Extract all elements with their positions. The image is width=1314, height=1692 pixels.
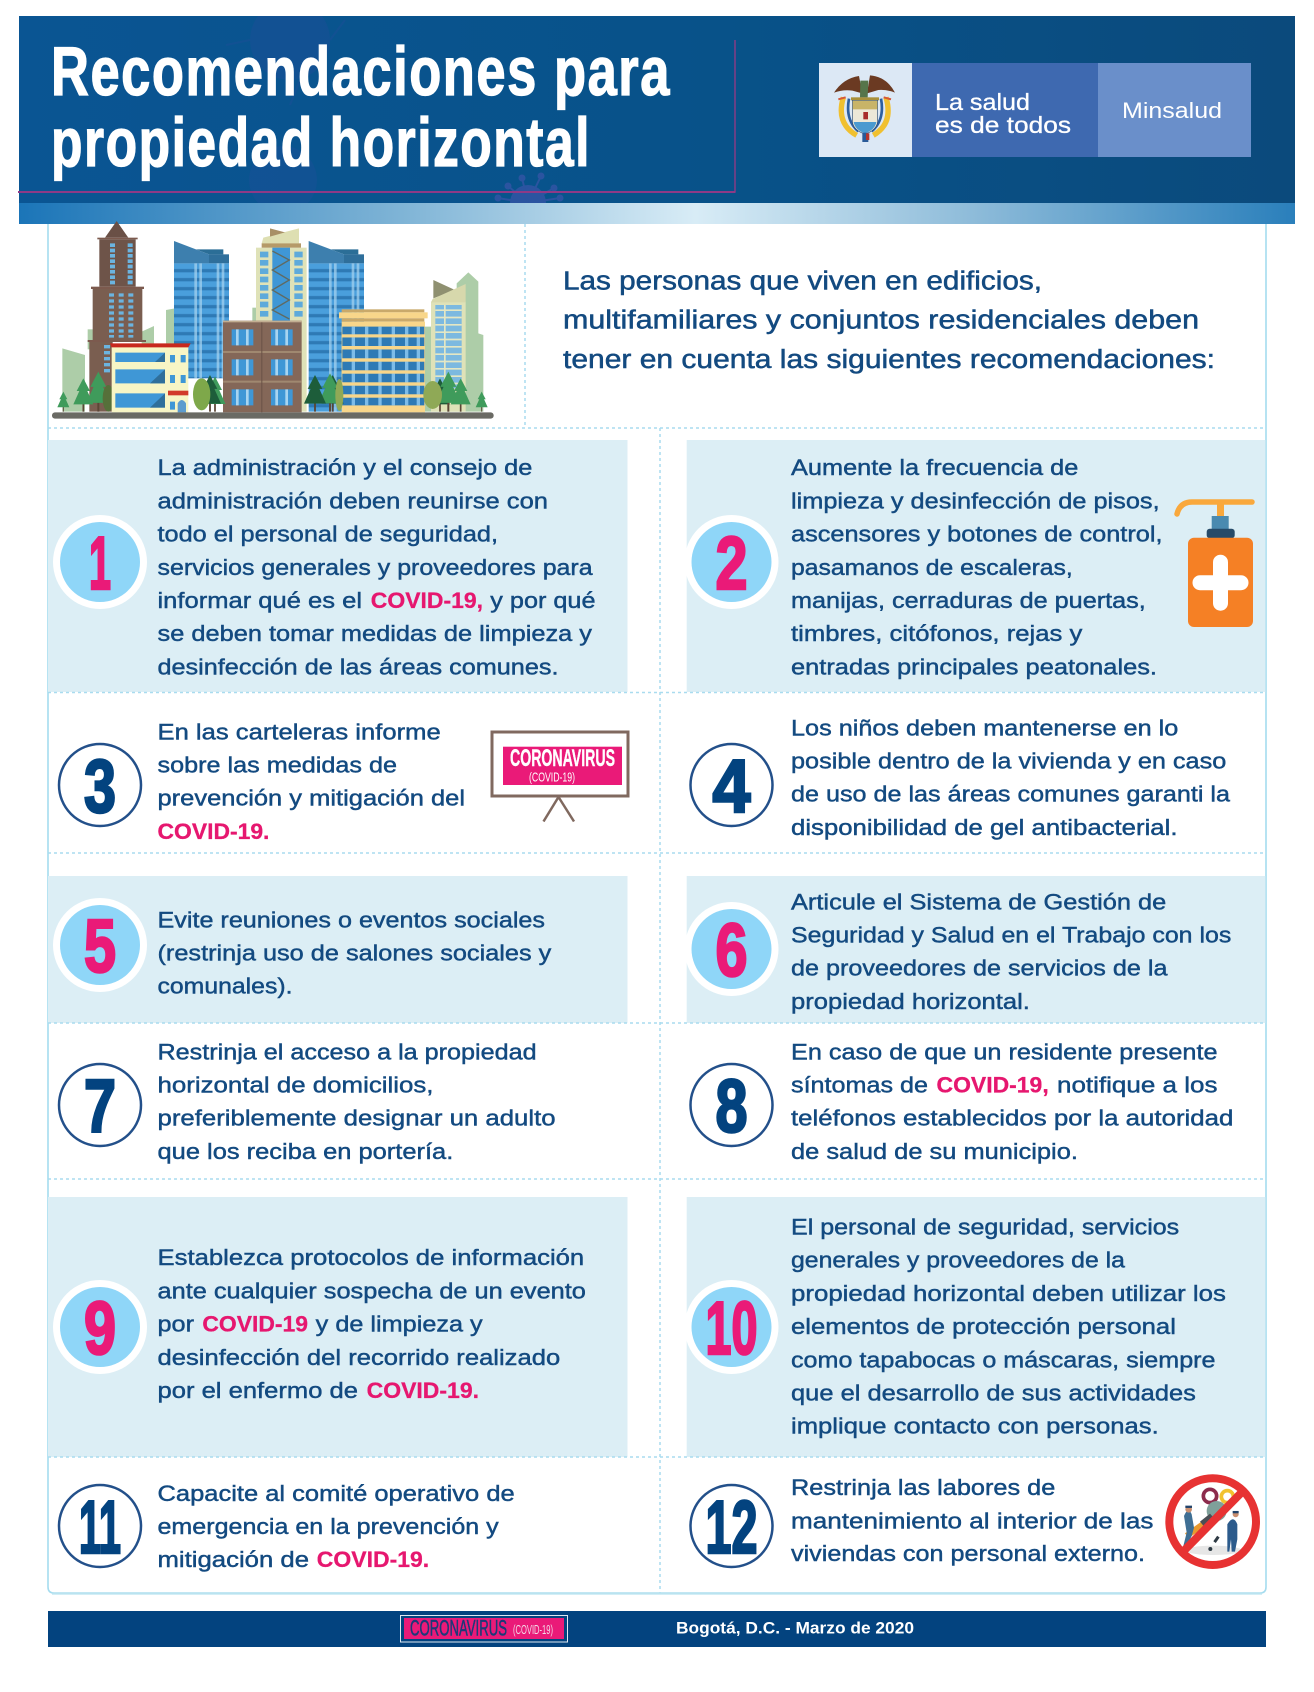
- text block 11: Capacite al comité operativo de: [158, 1481, 515, 1506]
- ministry name: Minsalud: [1122, 98, 1222, 123]
- icon: coat of arms: [834, 75, 895, 142]
- intro text: [563, 268, 1215, 374]
- number badge 3: [59, 744, 141, 828]
- text block 2: ascensores y botones de control,: [791, 522, 1162, 547]
- slogan: es de todos: [935, 112, 1071, 138]
- text block 12: Restrinja las labores de: [791, 1475, 1055, 1500]
- text block 1: se deben tomar medidas de limpieza y: [158, 621, 593, 646]
- gradient strip: [19, 203, 1295, 224]
- number badge 1: 1: [89, 521, 111, 605]
- text block 4: Los niños deben mantenerse en lo: [791, 715, 1178, 740]
- text block 1: administración deben reunirse con: [158, 488, 548, 514]
- panel frame: [48, 224, 1266, 1593]
- text block 5: [158, 907, 552, 998]
- number badge 3: 3: [84, 744, 116, 828]
- number badge 7: [59, 1064, 141, 1148]
- brown tower: [88, 221, 146, 412]
- number badge 8: 8: [716, 1064, 748, 1148]
- text block 10: generales y proveedores de la: [791, 1248, 1126, 1273]
- text block 8: de salud de su municipio.: [791, 1139, 1078, 1164]
- number badge 10: [684, 1280, 778, 1374]
- text block 11: mitigación de: [158, 1547, 309, 1572]
- text block 1: servicios generales y proveedores para: [158, 555, 593, 580]
- panel: recommendation 3: [59, 719, 628, 844]
- text block 12: viviendas con personal externo.: [791, 1541, 1145, 1566]
- number badge 9: 9: [84, 1286, 116, 1370]
- text block 1: [158, 455, 596, 679]
- number badge 11: 11: [79, 1485, 121, 1569]
- coronavirus badge: CORONAVIRUS: [410, 1616, 507, 1640]
- panel: recommendation 1: [53, 455, 596, 679]
- text block 9: COVID-19: [202, 1312, 308, 1337]
- right pale tower: [431, 280, 466, 412]
- blue towers: [174, 241, 364, 412]
- trees: [57, 372, 488, 412]
- central cream tower: [256, 228, 307, 412]
- text block 4: posible dentro de la vivienda y en caso: [791, 748, 1226, 774]
- intro text: multifamiliares y conjuntos residenciales deben: [563, 306, 1199, 334]
- text block 9: COVID-19.: [367, 1378, 479, 1403]
- number badge 4: 4: [712, 744, 751, 828]
- text block 7: preferiblemente designar un adulto: [158, 1106, 556, 1131]
- text block 1: todo el personal de seguridad,: [158, 522, 498, 547]
- number badge 5: [53, 898, 147, 992]
- slogan: [935, 89, 1071, 138]
- text block 5: comunales).: [158, 974, 292, 998]
- text block 9: Establezca protocolos de información: [158, 1245, 584, 1270]
- number badge 12: 12: [706, 1485, 758, 1569]
- text block 7: [158, 1039, 556, 1164]
- text block 2: limpieza y desinfección de pisos,: [791, 488, 1160, 514]
- text block 5: (restrinja uso de salones sociales y: [158, 940, 552, 966]
- text block 9: desinfección del recorrido realizado: [158, 1345, 560, 1370]
- text block 3: COVID-19.: [158, 819, 269, 844]
- text block 11: [158, 1481, 515, 1572]
- text block 2: manijas, cerraduras de puertas,: [791, 588, 1146, 613]
- panel: recommendation 9: [53, 1245, 586, 1403]
- ground: [52, 412, 494, 419]
- coronavirus badge: (COVID-19): [513, 1623, 553, 1637]
- number badge 6: 6: [716, 908, 748, 992]
- text block 10: [791, 1214, 1226, 1439]
- intro text: Las personas que viven en edificios,: [563, 268, 1042, 296]
- text block 7: horizontal de domicilios,: [158, 1072, 434, 1098]
- text block 6: [791, 889, 1231, 1014]
- text block 2: Aumente la frecuencia de: [791, 455, 1078, 480]
- text block 8: En caso de que un residente presente: [791, 1039, 1218, 1064]
- icon: coronavirus board: CORONAVIRUS: [510, 745, 615, 772]
- icon: coronavirus board: (COVID-19): [529, 770, 575, 784]
- title: Recomendaciones para: [51, 33, 671, 110]
- text block 7: Restrinja el acceso a la propiedad: [158, 1039, 537, 1064]
- text block 10: implique contacto con personas.: [791, 1414, 1159, 1439]
- text block 9: [158, 1245, 586, 1403]
- text block 8: notifique a los: [1057, 1072, 1218, 1098]
- number badge 10: 10: [706, 1286, 758, 1370]
- panel: recommendation 2: [684, 455, 1253, 679]
- number badge 8: [690, 1064, 772, 1148]
- text block 12: mantenimiento al interior de las: [791, 1508, 1153, 1533]
- number badge 2: 2: [716, 521, 748, 605]
- text block 4: de uso de las áreas comunes garanti la: [791, 782, 1231, 807]
- text block 9: por el enfermo de: [158, 1378, 358, 1403]
- panel: recommendation 8: [690, 1039, 1233, 1164]
- text block 9: ante cualquier sospecha de un evento: [158, 1278, 586, 1303]
- text block 3: sobre las medidas de: [158, 752, 397, 778]
- panel: recommendation 4: [690, 715, 1231, 840]
- illustration: city buildings: [52, 221, 494, 419]
- text block 3: [158, 719, 465, 844]
- number badge 11: [59, 1485, 141, 1569]
- title: propiedad horizontal: [51, 104, 591, 181]
- panel: recommendation 12: [690, 1475, 1256, 1569]
- slogan: La salud: [935, 89, 1030, 115]
- text block 7: que los reciba en portería.: [158, 1139, 453, 1164]
- panel: recommendation 11: [59, 1481, 515, 1572]
- panel: recommendation 10: [684, 1214, 1226, 1439]
- panel: recommendation 5: [53, 898, 552, 998]
- number badge 9: [53, 1280, 147, 1374]
- text block 12: [791, 1475, 1153, 1566]
- text block 6: Articule el Sistema de Gestión de: [791, 889, 1166, 914]
- text block 9: y de limpieza y: [316, 1312, 484, 1337]
- text block 9: por: [158, 1312, 195, 1337]
- text block 3: prevención y mitigación del: [158, 786, 465, 811]
- text block 3: En las carteleras informe: [158, 719, 441, 744]
- text block 8: [791, 1039, 1233, 1164]
- text block 8: teléfonos establecidos por la autoridad: [791, 1106, 1233, 1131]
- number badge 6: [684, 902, 778, 996]
- text block 5: Evite reuniones o eventos sociales: [158, 907, 545, 932]
- accent line frame: [18, 40, 735, 192]
- text block 11: COVID-19.: [317, 1547, 429, 1572]
- intro text: tener en cuenta las siguientes recomendaciones:: [563, 346, 1215, 374]
- icon: no maintenance sign: [1169, 1478, 1256, 1565]
- icon: sanitizer bottle: [1177, 502, 1253, 627]
- title: [51, 33, 671, 181]
- text block 1: La administración y el consejo de: [158, 455, 532, 480]
- shaded row backgrounds: [48, 440, 1266, 1457]
- icon: small virus: [494, 172, 564, 203]
- footer date: Bogotá, D.C. - Marzo de 2020: [676, 1618, 914, 1638]
- text block 6: propiedad horizontal.: [791, 989, 1030, 1014]
- yellow banded building: [339, 309, 428, 412]
- text block 2: pasamanos de escaleras,: [791, 555, 1073, 580]
- logo block: [819, 63, 1251, 157]
- yellow low building: [110, 343, 191, 412]
- panel: recommendation 6: [684, 889, 1231, 1014]
- header banner: [18, 16, 1295, 203]
- text block 1: desinfección de las áreas comunes.: [158, 654, 558, 679]
- footer bar: [48, 1611, 1266, 1647]
- text block 8: síntomas de: [791, 1072, 928, 1098]
- text block 4: disponibilidad de gel antibacterial.: [791, 815, 1178, 840]
- number badge 7: 7: [84, 1064, 116, 1148]
- background pale buildings: [62, 272, 483, 412]
- number badge 1: [53, 515, 147, 609]
- text block 10: propiedad horizontal deben utilizar los: [791, 1281, 1226, 1306]
- brown building: [223, 321, 302, 412]
- text block 6: Seguridad y Salud en el Trabajo con los: [791, 922, 1231, 948]
- panel: recommendation 7: [59, 1039, 556, 1164]
- text block 2: timbres, citófonos, rejas y: [791, 621, 1083, 646]
- number badge 12: [690, 1485, 772, 1569]
- text block 1: COVID-19,: [371, 588, 483, 613]
- text block 10: como tapabocas o máscaras, siempre: [791, 1347, 1216, 1372]
- text block 1: informar qué es el: [158, 588, 362, 613]
- text block 2: [791, 455, 1162, 679]
- text block 10: El personal de seguridad, servicios: [791, 1214, 1179, 1239]
- text block 2: entradas principales peatonales.: [791, 654, 1157, 679]
- text block 4: [791, 715, 1231, 840]
- number badge 5: 5: [84, 904, 116, 988]
- number badge 4: [690, 744, 772, 828]
- text block 8: COVID-19,: [936, 1072, 1049, 1098]
- icon: coronavirus board: [492, 732, 628, 822]
- text block 10: que el desarrollo de sus actividades: [791, 1380, 1196, 1406]
- text block 10: elementos de protección personal: [791, 1314, 1176, 1339]
- number badge 2: [684, 515, 778, 609]
- text block 6: de proveedores de servicios de la: [791, 956, 1168, 981]
- text block 1: y por qué: [490, 588, 596, 613]
- text block 11: emergencia en la prevención y: [158, 1514, 500, 1539]
- decorative virus shapes: [226, 16, 346, 105]
